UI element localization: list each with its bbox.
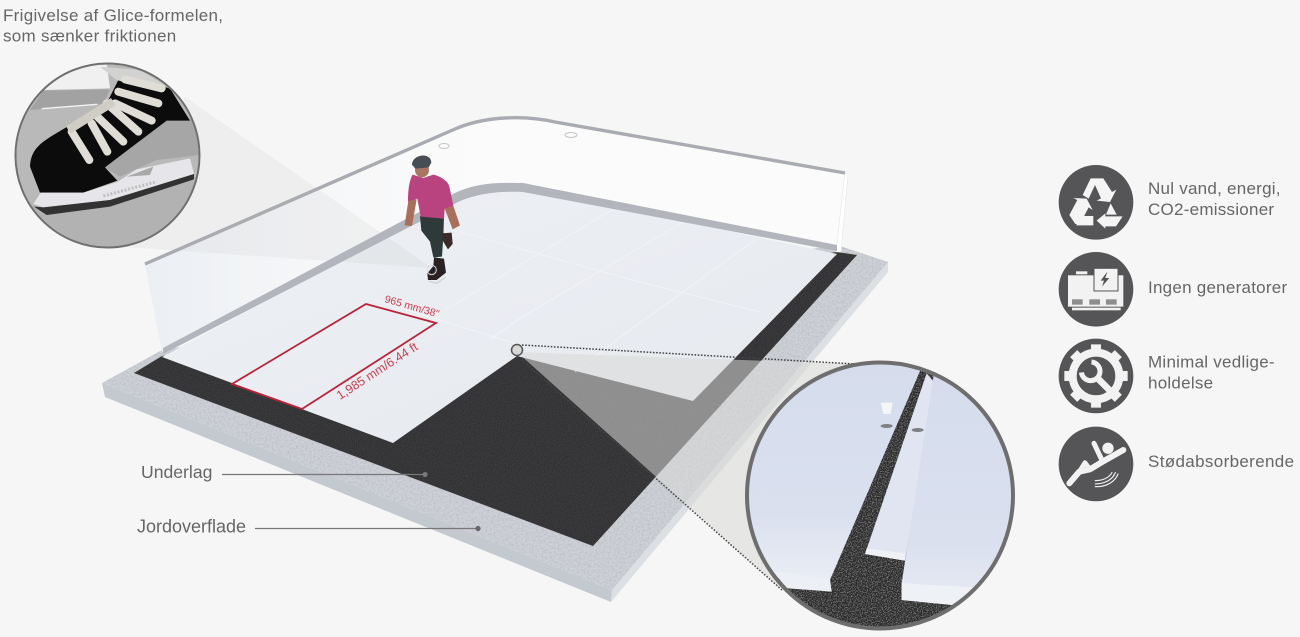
label: underlay xyxy=(141,462,428,482)
text: Minimal vedlige- xyxy=(1148,352,1275,372)
panel seams xyxy=(375,208,760,372)
circle outline xyxy=(16,64,200,248)
underlay xyxy=(134,252,857,546)
arms xyxy=(405,199,460,229)
icon: falling person xyxy=(1059,427,1133,501)
red panel outline xyxy=(232,304,436,409)
panel joint close-up circle xyxy=(737,357,1023,630)
glass wall xyxy=(145,117,845,352)
skate photo xyxy=(15,63,200,250)
circle outline xyxy=(747,362,1013,628)
benefit: no generators xyxy=(1059,252,1287,327)
icon: generator xyxy=(1059,252,1133,327)
shirt xyxy=(408,175,453,219)
dotted leader lines xyxy=(522,345,855,590)
wall right edge xyxy=(836,173,848,252)
front skate xyxy=(427,257,446,280)
caption: skate: Frigivelse af Glice-formelen, xyxy=(3,6,223,25)
icon: recycle xyxy=(1059,165,1133,240)
kerb xyxy=(163,183,837,354)
back skate xyxy=(441,233,453,249)
width dimension: 965 mm/38" xyxy=(383,293,441,320)
length dimension: 1,985 mm/6.44 ft xyxy=(334,339,421,403)
blade xyxy=(429,277,445,283)
label: ground surface: Jordoverflade xyxy=(137,516,246,536)
legs xyxy=(420,216,444,257)
text: Stødabsorberende xyxy=(1148,452,1294,471)
skate close-up circle xyxy=(15,63,200,250)
rink diagram xyxy=(102,117,888,602)
benefit: shock absorbing xyxy=(1059,427,1294,501)
head xyxy=(415,163,429,177)
top rail xyxy=(145,118,845,264)
ice surface xyxy=(162,187,837,443)
wall fixtures xyxy=(439,132,577,148)
benefit: zero water and energy xyxy=(1059,165,1281,240)
helmet xyxy=(412,156,431,169)
joint photo xyxy=(749,364,1011,626)
text: holdelse xyxy=(1148,374,1213,392)
zoom funnel: skate xyxy=(125,97,432,268)
ground surface slab xyxy=(102,245,888,602)
skater xyxy=(405,156,460,283)
text: CO2-emissioner xyxy=(1148,200,1274,219)
benefit: minimal maintenance xyxy=(1059,339,1275,413)
label: ground surface xyxy=(137,516,481,536)
icon: gear and wrench xyxy=(1059,339,1133,413)
label: underlay: Underlag xyxy=(141,462,212,482)
text: Ingen generatorer xyxy=(1148,278,1287,297)
text: Nul vand, energi, xyxy=(1148,179,1281,198)
caption: skate: som sænker friktionen xyxy=(3,26,177,46)
skate marker xyxy=(427,265,436,275)
joint marker xyxy=(512,344,522,356)
zoom funnel: panel joint xyxy=(517,352,856,588)
